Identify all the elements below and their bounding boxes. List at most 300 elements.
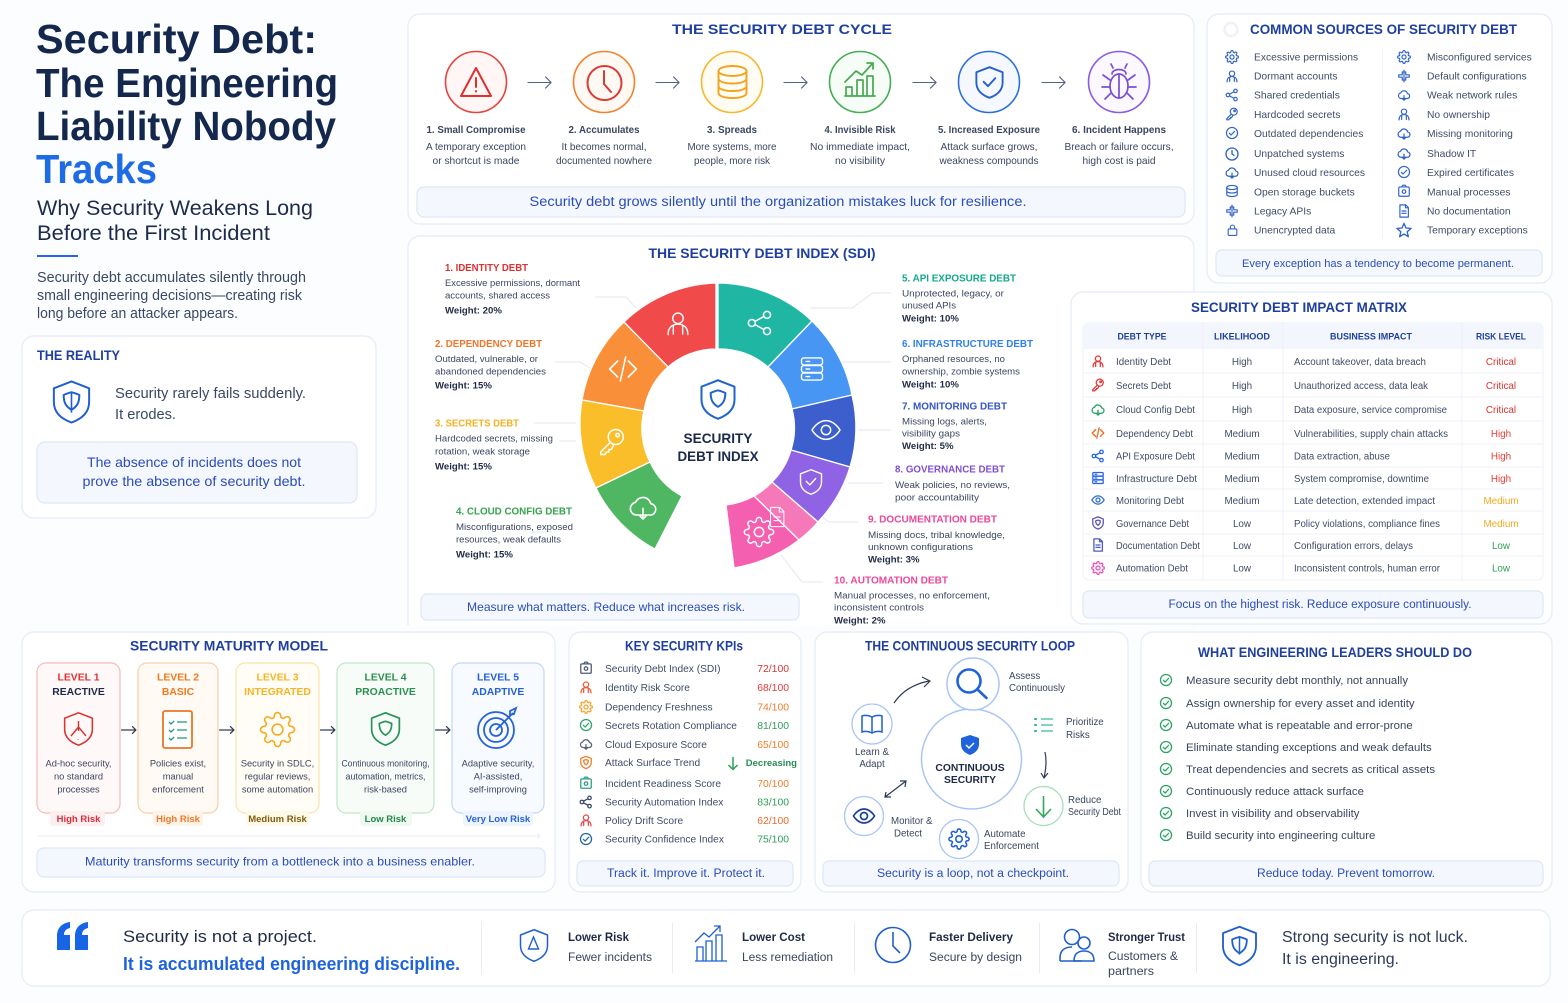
callout: Security debt grows silently until the organization mistakes luck for resilience. [530, 194, 1026, 209]
kpi names: Cloud Exposure Score [605, 740, 707, 751]
level 2 card: BASIC [162, 687, 195, 698]
checklist: Build security into engineering culture [1186, 830, 1375, 842]
debt type column: Identity Debt [1116, 357, 1171, 368]
benefit: stronger trust: Customers & [1108, 951, 1178, 963]
business impact column: Configuration errors, delays [1294, 541, 1413, 552]
label 6 infrastructure: ownership, zombie systems [902, 366, 1020, 378]
kpi names: Security Automation Index [605, 798, 723, 808]
reality statement: Security rarely fails suddenly. [115, 386, 306, 402]
label 9 documentation [868, 514, 1005, 566]
label 6 infrastructure: Orphaned resources, no [902, 354, 1005, 365]
hero title: The Engineering [36, 60, 338, 106]
label 2 dependency [435, 339, 546, 392]
right source list: No documentation [1427, 206, 1511, 218]
arrow [122, 727, 136, 733]
segment 1 identity [624, 283, 716, 367]
arrow [784, 77, 807, 88]
level 2 card: Policies exist, [150, 758, 206, 768]
center circle: SECURITY [944, 775, 996, 786]
center label [678, 380, 759, 464]
heading: the reality: THE REALITY [37, 347, 121, 363]
panel: continuous security loop [815, 632, 1128, 892]
callout: Security is a loop, not a checkpoint. [877, 868, 1069, 880]
benefit: lower risk: Lower Risk [568, 932, 630, 944]
likelihood column: Medium [1224, 474, 1260, 485]
risk level column [1483, 357, 1519, 574]
node: reduce: Reduce [1068, 795, 1101, 806]
kpi values: 62/100 [757, 816, 789, 827]
callout: Reduce today. Prevent tomorrow. [1257, 868, 1435, 880]
level 4 card: PROACTIVE [355, 687, 416, 698]
right source list: No ownership [1427, 110, 1490, 121]
likelihood column: Low [1233, 541, 1252, 552]
kpi values: 65/100 [757, 740, 789, 751]
callout [823, 861, 1119, 886]
arrow [1042, 77, 1065, 88]
subtitle: Before the First Incident [37, 222, 270, 245]
step 1: A temporary exception [426, 142, 526, 153]
heading: sdi: THE SECURITY DEBT INDEX (SDI) [648, 245, 876, 261]
step 5: weakness compounds [939, 156, 1038, 167]
level 5 card: ADAPTIVE [472, 687, 524, 698]
label 5 api exposure: Unprotected, legacy, or [902, 288, 1005, 300]
likelihood column: High [1232, 357, 1252, 368]
label 1 identity: Excessive permissions, dormant [445, 278, 580, 289]
table [1083, 323, 1543, 580]
business impact column: Data exposure, service compromise [1294, 405, 1447, 416]
callout: Every exception has a tendency to become permanent. [1242, 258, 1514, 270]
checklist: Treat dependencies and secrets as critical assets [1186, 764, 1435, 776]
callout: prove the absence of security debt. [82, 473, 306, 489]
left source list: Unpatched systems [1254, 149, 1344, 160]
label 4 cloud config: Weight: 15% [456, 550, 513, 560]
closing quote: Security is not a project. [123, 927, 317, 946]
debt type column: Secrets Debt [1116, 381, 1171, 392]
label 4 cloud config: 4. CLOUD CONFIG DEBT [456, 506, 573, 518]
level 3 card: regular reviews, [245, 772, 310, 782]
business impact column: Vulnerabilities, supply chain attacks [1294, 429, 1448, 440]
heading: maturity: SECURITY MATURITY MODEL [130, 638, 328, 654]
kpi values: 70/100 [757, 779, 789, 790]
level 4 card: Low Risk [365, 814, 407, 825]
segment 2 dependency [582, 322, 668, 411]
step 6: high cost is paid [1082, 156, 1156, 167]
debt type column: API Exposure Debt [1116, 452, 1195, 462]
step 2 [556, 52, 652, 167]
callout: Focus on the highest risk. Reduce exposure continuously. [1168, 599, 1472, 611]
intro text: small engineering decisions—creating risk [37, 288, 303, 304]
likelihood column [1224, 357, 1260, 574]
label 5 api exposure: unused APIs [902, 300, 956, 312]
label 2 dependency: Outdated, vulnerable, or [435, 354, 539, 365]
label 1 identity [445, 263, 580, 316]
donut icons [601, 311, 840, 547]
left source list: Shared credentials [1254, 90, 1340, 102]
node: learn: Learn & [855, 747, 889, 758]
node: monitor: Detect [894, 828, 922, 840]
icon: quote mark [57, 922, 88, 950]
level 1 card: REACTIVE [52, 687, 105, 698]
node: prioritize: Prioritize [1066, 717, 1104, 728]
level 1 card: processes [57, 784, 100, 794]
row icons [1092, 356, 1104, 574]
benefit: faster delivery: Faster Delivery [929, 932, 1014, 944]
reality statement: It erodes. [115, 407, 176, 423]
left source list: Open storage buckets [1254, 188, 1355, 198]
step 3 [688, 52, 777, 167]
label 9 documentation: 9. DOCUMENTATION DEBT [868, 514, 998, 526]
icon: trend arrow [728, 757, 738, 770]
label 5 api exposure: Weight: 10% [902, 314, 959, 324]
kpi values: 74/100 [757, 702, 789, 714]
center label: DEBT INDEX [678, 448, 759, 464]
hero title: Liability Nobody [36, 103, 336, 149]
callout [37, 848, 545, 877]
kpi values: 72/100 [757, 664, 789, 675]
label 9 documentation: Weight: 3% [868, 554, 920, 566]
left source list [1226, 51, 1365, 237]
panel: what engineering leaders should do [1141, 632, 1552, 892]
level 5 card: self-improving [469, 784, 527, 794]
callout [1083, 591, 1543, 618]
checklist [1186, 675, 1435, 842]
node: assess: Continuously [1009, 683, 1065, 694]
step 4: No immediate impact, [810, 142, 910, 153]
business impact column: Late detection, extended impact [1294, 496, 1435, 507]
label 2 dependency: abandoned dependencies [435, 366, 546, 378]
node: assess: Assess [1009, 671, 1040, 682]
heading: kpis: KEY SECURITY KPIs [625, 638, 743, 654]
arrow: prioritize to reduce [1041, 752, 1048, 778]
node: automate: Enforcement [984, 841, 1039, 852]
left source list: Hardcoded secrets [1254, 110, 1340, 121]
benefit: lower cost: Lower Cost [742, 932, 805, 944]
label 8 governance [895, 464, 1010, 504]
callout: Maturity transforms security from a bottleneck into a business enabler. [85, 854, 475, 868]
level 3 card: INTEGRATED [244, 687, 311, 698]
risk level column: Medium [1483, 496, 1519, 507]
callout: Measure what matters. Reduce what increases risk. [467, 600, 745, 614]
label 1 identity: 1. IDENTITY DEBT [445, 263, 529, 274]
label 10 automation: Weight: 2% [834, 616, 886, 626]
kpi values [746, 664, 797, 846]
step 6: Breach or failure occurs, [1064, 142, 1174, 153]
arrow: learn to assess [894, 677, 930, 703]
heading: loop: THE CONTINUOUS SECURITY LOOP [865, 638, 1075, 654]
business impact column: Unauthorized access, data leak [1294, 381, 1428, 392]
label 8 governance: Weak policies, no reviews, [895, 480, 1010, 491]
business impact column: Account takeover, data breach [1294, 357, 1426, 368]
callout [577, 861, 793, 886]
label 2 dependency: 2. DEPENDENCY DEBT [435, 339, 543, 350]
panel: closing banner [22, 910, 1550, 986]
accent rule [37, 255, 78, 257]
panel: common sources of security debt [1207, 14, 1552, 283]
business impact column: Inconsistent controls, human error [1294, 564, 1441, 574]
node: automate: Automate [984, 829, 1025, 840]
segment 6 infrastructure [768, 321, 852, 409]
label 1 identity: Weight: 20% [445, 306, 502, 316]
kpi names: Secrets Rotation Compliance [605, 721, 737, 732]
node: reduce: Security Debt [1068, 807, 1121, 818]
debt type column: Infrastructure Debt [1116, 474, 1197, 485]
callout [37, 442, 357, 503]
label 7 monitoring: Weight: 5% [902, 441, 954, 452]
segment 10 automation [726, 496, 799, 568]
label 8 governance: 8. GOVERNANCE DEBT [895, 464, 1006, 476]
left source list: Outdated dependencies [1254, 129, 1363, 140]
level 2 card [138, 663, 218, 826]
kpi names: Dependency Freshness [605, 702, 713, 714]
node: prioritize: Risks [1066, 730, 1090, 741]
label 10 automation [834, 576, 990, 626]
right source list: Missing monitoring [1427, 129, 1513, 140]
risk level column: Low [1492, 541, 1511, 552]
level 1 card: LEVEL 1 [58, 672, 100, 684]
label 6 infrastructure [902, 339, 1034, 390]
label 6 infrastructure: 6. INFRASTRUCTURE DEBT [902, 339, 1034, 350]
level 5 card: Adaptive security, [462, 758, 534, 768]
label 3 secrets: 3. SECRETS DEBT [435, 418, 520, 430]
intro text: long before an attacker appears. [37, 306, 238, 322]
reality statement [115, 386, 306, 423]
table header: RISK LEVEL [1476, 332, 1526, 342]
arrow: monitor to center [885, 781, 906, 797]
label 2 dependency: Weight: 15% [435, 380, 492, 392]
step 2: documented nowhere [556, 156, 652, 167]
step 4: no visibility [835, 156, 886, 167]
table header [1118, 332, 1526, 342]
level 4 card [337, 663, 434, 826]
benefit: faster delivery [876, 928, 1022, 964]
checklist: Assign ownership for every asset and identity [1186, 698, 1415, 710]
business impact column: Data extraction, abuse [1294, 452, 1390, 462]
step 1: or shortcut is made [432, 156, 520, 167]
step 4: 4. Invisible Risk [824, 125, 896, 136]
risk level column: High [1491, 452, 1511, 462]
arrow [321, 727, 335, 733]
likelihood column: High [1232, 381, 1252, 392]
debt type column: Cloud Config Debt [1116, 405, 1195, 416]
label 4 cloud config: Misconfigurations, exposed [456, 522, 573, 533]
label 10 automation: Manual processes, no enforcement, [834, 590, 990, 602]
node: reduce [1024, 786, 1121, 826]
right source list: Default configurations [1427, 72, 1527, 82]
level 5 card [452, 663, 544, 826]
label 9 documentation: Missing docs, tribal knowledge, [868, 530, 1005, 541]
label 10 automation: 10. AUTOMATION DEBT [834, 576, 949, 586]
segment 4 cloud config [596, 462, 682, 549]
heading: leaders: WHAT ENGINEERING LEADERS SHOULD DO [1198, 644, 1472, 660]
level 2 card: enforcement [152, 784, 204, 794]
debt type column: Governance Debt [1116, 519, 1189, 530]
risk level column: Medium [1483, 519, 1519, 530]
table header: DEBT TYPE [1118, 332, 1167, 342]
benefit: lower risk: Fewer incidents [568, 952, 652, 964]
panel: security maturity model [22, 632, 555, 892]
arrow [436, 727, 450, 733]
benefit: stronger trust [1060, 930, 1185, 978]
debt type column: Automation Debt [1116, 564, 1188, 574]
center circle: CONTINUOUS [935, 763, 1005, 774]
step 1: 1. Small Compromise [426, 125, 526, 136]
benefit: lower risk [520, 930, 652, 964]
business impact column: System compromise, downtime [1294, 474, 1429, 485]
risk level column: Critical [1486, 381, 1516, 392]
checklist: Invest in visibility and observability [1186, 808, 1360, 820]
step 3: More systems, more [688, 142, 777, 153]
step 6: 6. Incident Happens [1072, 125, 1166, 136]
closing quote: It is accumulated engineering discipline. [123, 954, 460, 974]
kpi names: Identity Risk Score [605, 683, 690, 694]
step 2: 2. Accumulates [568, 125, 640, 136]
center circle [922, 709, 1022, 809]
left source list: Unused cloud resources [1254, 168, 1365, 179]
checklist: Measure security debt monthly, not annually [1186, 675, 1408, 687]
closing quote [123, 927, 460, 974]
closing shield statement: It is engineering. [1282, 951, 1399, 968]
right source list [1397, 51, 1532, 237]
kpi values: 81/100 [757, 721, 789, 732]
closing shield statement: Strong security is not luck. [1282, 929, 1468, 946]
kpi values: Decreasing [746, 758, 797, 769]
heading: matrix: SECURITY DEBT IMPACT MATRIX [1191, 299, 1408, 315]
node: prioritize [1035, 717, 1104, 741]
kpi names [605, 664, 737, 846]
label 5 api exposure [902, 274, 1017, 324]
kpi names: Security Debt Index (SDI) [605, 664, 720, 675]
likelihood column: High [1232, 405, 1252, 416]
kpi names: Security Confidence Index [605, 834, 724, 846]
benefit: lower cost: Less remediation [742, 952, 833, 964]
subtitle: Why Security Weakens Long [37, 197, 313, 220]
label 1 identity: accounts, shared access [445, 290, 550, 302]
label 3 secrets: Weight: 15% [435, 462, 492, 472]
label 4 cloud config: resources, weak defaults [456, 534, 561, 546]
step 5 [938, 52, 1040, 167]
callout [1216, 250, 1542, 276]
label 9 documentation: unknown configurations [868, 542, 973, 553]
arrow [220, 727, 234, 733]
closing shield statement [1223, 927, 1468, 968]
label 7 monitoring: visibility gaps [902, 428, 960, 440]
level 4 card: automation, metrics, [346, 772, 426, 782]
debt type column: Documentation Debt [1116, 541, 1200, 552]
heading: sources: COMMON SOURCES OF SECURITY DEBT [1250, 21, 1517, 37]
left source list: Legacy APIs [1254, 206, 1311, 218]
risk level column: Critical [1486, 357, 1516, 368]
node: assess [947, 658, 1065, 710]
level 2 card: LEVEL 2 [157, 672, 199, 684]
label 7 monitoring: Missing logs, alerts, [902, 416, 987, 428]
business impact column: Policy violations, compliance fines [1294, 519, 1440, 530]
donut chart [580, 283, 856, 568]
level 2 card: High Risk [156, 814, 201, 825]
hero title: Security Debt: [36, 16, 317, 62]
left source list: Unencrypted data [1254, 226, 1336, 236]
right source list: Temporary exceptions [1427, 226, 1528, 236]
level 3 card: Medium Risk [248, 814, 308, 825]
level 5 card: LEVEL 5 [477, 672, 519, 684]
likelihood column: Medium [1224, 429, 1260, 440]
node: monitor: Monitor & [891, 816, 933, 827]
segment 7 monitoring [791, 395, 856, 467]
intro text [37, 270, 306, 322]
likelihood column: Low [1233, 519, 1252, 530]
table header: LIKELIHOOD [1214, 332, 1270, 342]
kpi names: Incident Readiness Score [605, 779, 721, 790]
step 2: It becomes normal, [562, 142, 646, 153]
risk level column: High [1491, 474, 1511, 485]
benefit: stronger trust: partners [1108, 966, 1154, 978]
label 3 secrets: rotation, weak storage [435, 446, 530, 458]
right source list: Misconfigured services [1427, 52, 1532, 64]
likelihood column: Medium [1224, 452, 1260, 462]
table header: BUSINESS IMPACT [1330, 332, 1412, 342]
icon: faint heading badge [1224, 23, 1238, 36]
hero title: Tracks [36, 146, 157, 192]
checklist: Automate what is repeatable and error-prone [1186, 720, 1413, 732]
callout [1149, 861, 1543, 886]
level 4 card: risk-based [364, 784, 407, 794]
label 7 monitoring [902, 402, 1008, 452]
step 6 [1064, 52, 1174, 167]
right source list: Weak network rules [1427, 90, 1517, 102]
segment 5 api exposure [718, 283, 812, 367]
arrow [913, 77, 936, 88]
benefit: faster delivery: Secure by design [929, 952, 1022, 964]
left source list: Excessive permissions [1254, 52, 1358, 64]
arrow [528, 77, 551, 88]
segment 8 governance [772, 450, 850, 522]
checklist: Continuously reduce attack surface [1186, 786, 1364, 798]
heading: cycle: THE SECURITY DEBT CYCLE [672, 21, 892, 37]
benefit: stronger trust: Stronger Trust [1108, 932, 1185, 944]
right source list: Shadow IT [1427, 149, 1477, 160]
likelihood column: Low [1233, 564, 1252, 574]
level 1 card: Ad-hoc security, [46, 758, 111, 768]
step 3: 3. Spreads [707, 125, 757, 136]
connector lines [532, 293, 891, 582]
benefit: lower cost [695, 926, 833, 964]
kpi values: 75/100 [757, 834, 789, 846]
label 3 secrets [435, 418, 553, 472]
label 3 secrets: Hardcoded secrets, missing [435, 434, 553, 444]
debt type column: Monitoring Debt [1116, 496, 1184, 507]
callout [417, 187, 1185, 217]
step 5: Attack surface grows, [940, 142, 1038, 153]
kpi values: 68/100 [757, 683, 789, 694]
right source list: Expired certificates [1427, 168, 1514, 179]
node: automate [940, 820, 1039, 858]
level 2 card: manual [163, 772, 193, 782]
business impact column [1294, 357, 1448, 574]
kpi values: 83/100 [757, 798, 789, 808]
level 3 card: some automation [242, 784, 313, 794]
step 3: people, more risk [694, 156, 771, 167]
level 1 card [37, 663, 120, 826]
level 3 card: Security in SDLC, [241, 758, 314, 768]
risk level column: Critical [1486, 405, 1516, 416]
step 5: 5. Increased Exposure [938, 125, 1040, 136]
intro text: Security debt accumulates silently through [37, 270, 306, 286]
node: monitor [844, 796, 933, 840]
hero title [36, 16, 338, 192]
panel: impact matrix [1071, 292, 1552, 624]
panel: the reality [22, 336, 376, 518]
panel: the security debt cycle [408, 14, 1194, 224]
step 1 [426, 52, 526, 167]
